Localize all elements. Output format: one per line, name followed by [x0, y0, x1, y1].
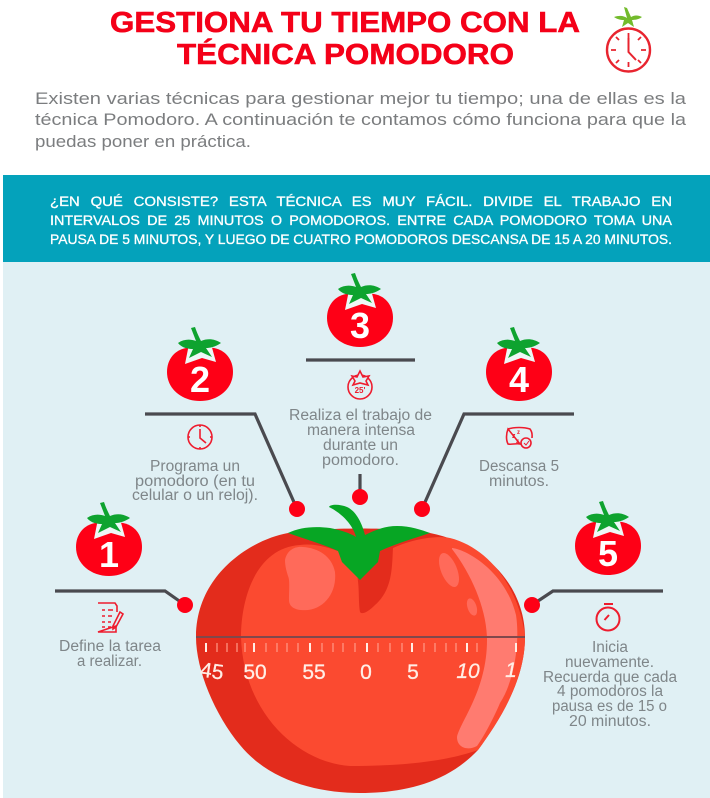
- step 1: [55, 502, 193, 670]
- icon: tomato 25 minutes: [348, 371, 372, 399]
- icon: sleep pillow: z: [517, 430, 520, 436]
- timer scale line: [196, 636, 525, 638]
- panel: explanation banner: PAUSA DE 5 MINUTOS, Y LUEGO DE CUATRO POMODOROS DESCANSA DE 15 A 20 MINUTOS.: [50, 232, 672, 247]
- tomato 5: [575, 501, 641, 575]
- timer minor ticks: [217, 643, 477, 652]
- panel: steps background: [3, 262, 710, 798]
- timer numbers: 10: [456, 660, 480, 683]
- icon: tomato clock: [607, 7, 650, 72]
- connector 4: [414, 414, 574, 517]
- text 5: pausa es de 15 o: [552, 698, 667, 715]
- tomato 3: 3: [350, 305, 370, 346]
- timer numbers: [199, 659, 517, 685]
- icon: sleep pillow: z: [512, 433, 516, 440]
- timer numbers: 45: [199, 659, 225, 685]
- tomato 1: [76, 502, 142, 576]
- tomato 1: 1: [99, 534, 119, 575]
- icon: stopwatch: [596, 604, 620, 630]
- step 4: [414, 327, 574, 517]
- title: GESTIONA TU TIEMPO CON LA: [110, 7, 580, 39]
- tomato 4: 4: [509, 359, 529, 400]
- text 1: [59, 638, 161, 670]
- icon: clock: [188, 425, 212, 449]
- timer numbers: 0: [360, 661, 372, 684]
- icon: checklist: [98, 603, 123, 632]
- text 2: pomodoro (en tu: [135, 473, 255, 490]
- timer ticks: [206, 643, 516, 652]
- text 2: [132, 458, 258, 504]
- icon: sleep pillow: [506, 428, 532, 448]
- intro text: [35, 89, 687, 151]
- connector 3: [306, 360, 415, 505]
- text 4: Descansa 5: [479, 458, 559, 475]
- text 5: [543, 639, 677, 730]
- text 5: nuevamente.: [565, 654, 654, 671]
- title: TÉCNICA POMODORO: [177, 37, 514, 71]
- text 1: a realizar.: [77, 653, 142, 670]
- big tomato timer: [196, 505, 525, 793]
- title: [110, 7, 580, 71]
- intro text: técnica Pomodoro. A continuación te contamos cómo funciona para que la: [35, 110, 687, 129]
- text 3: durante un: [323, 437, 398, 454]
- text 3: manera intensa: [307, 422, 415, 439]
- panel: explanation banner: [3, 175, 710, 262]
- text 5: 4 pomodoros la: [557, 683, 663, 700]
- connector 5: [524, 591, 663, 613]
- text 4: minutos.: [489, 473, 549, 490]
- tomato 4: [486, 327, 552, 401]
- timer numbers: 5: [407, 661, 419, 684]
- panel: explanation banner: ¿EN QUÉ CONSISTE? ESTA TÉCNICA ES MUY FÁCIL. DIVIDE EL TRABAJO EN: [50, 194, 672, 209]
- step 2: [132, 327, 305, 517]
- panel: explanation banner: INTERVALOS DE 25 MINUTOS O POMODOROS. ENTRE CADA POMODORO TOMA UNA: [50, 213, 672, 228]
- tomato 2: 2: [190, 359, 210, 400]
- tomato 2: [167, 327, 233, 401]
- timer numbers: 55: [302, 661, 326, 684]
- timer numbers: 1: [505, 659, 517, 682]
- step 3: [289, 273, 432, 505]
- connector 2: [145, 414, 305, 517]
- text 2: celular o un reloj).: [132, 487, 258, 504]
- tomato 3: [327, 273, 393, 347]
- connector 1: [55, 591, 193, 613]
- text 2: Programa un: [150, 458, 240, 475]
- text 3: [289, 407, 432, 469]
- text 5: 20 minutos.: [569, 713, 651, 730]
- tomato 5: 5: [598, 533, 618, 574]
- text 3: Realiza el trabajo de: [289, 407, 432, 424]
- intro text: puedas poner en práctica.: [35, 132, 251, 151]
- text 5: Recuerda que cada: [543, 669, 677, 686]
- timer numbers: 50: [243, 661, 267, 684]
- intro text: Existen varias técnicas para gestionar mejor tu tiempo; una de ellas es la: [35, 89, 687, 108]
- icon: tomato 25 minutes: 25': [355, 386, 365, 395]
- text 1: Define la tarea: [59, 638, 161, 655]
- step 5: [524, 501, 677, 730]
- text 4: [479, 458, 559, 490]
- text 5: Inicia: [592, 639, 628, 656]
- icon: sleep pillow: z: [516, 439, 519, 445]
- text 3: pomodoro.: [322, 452, 399, 469]
